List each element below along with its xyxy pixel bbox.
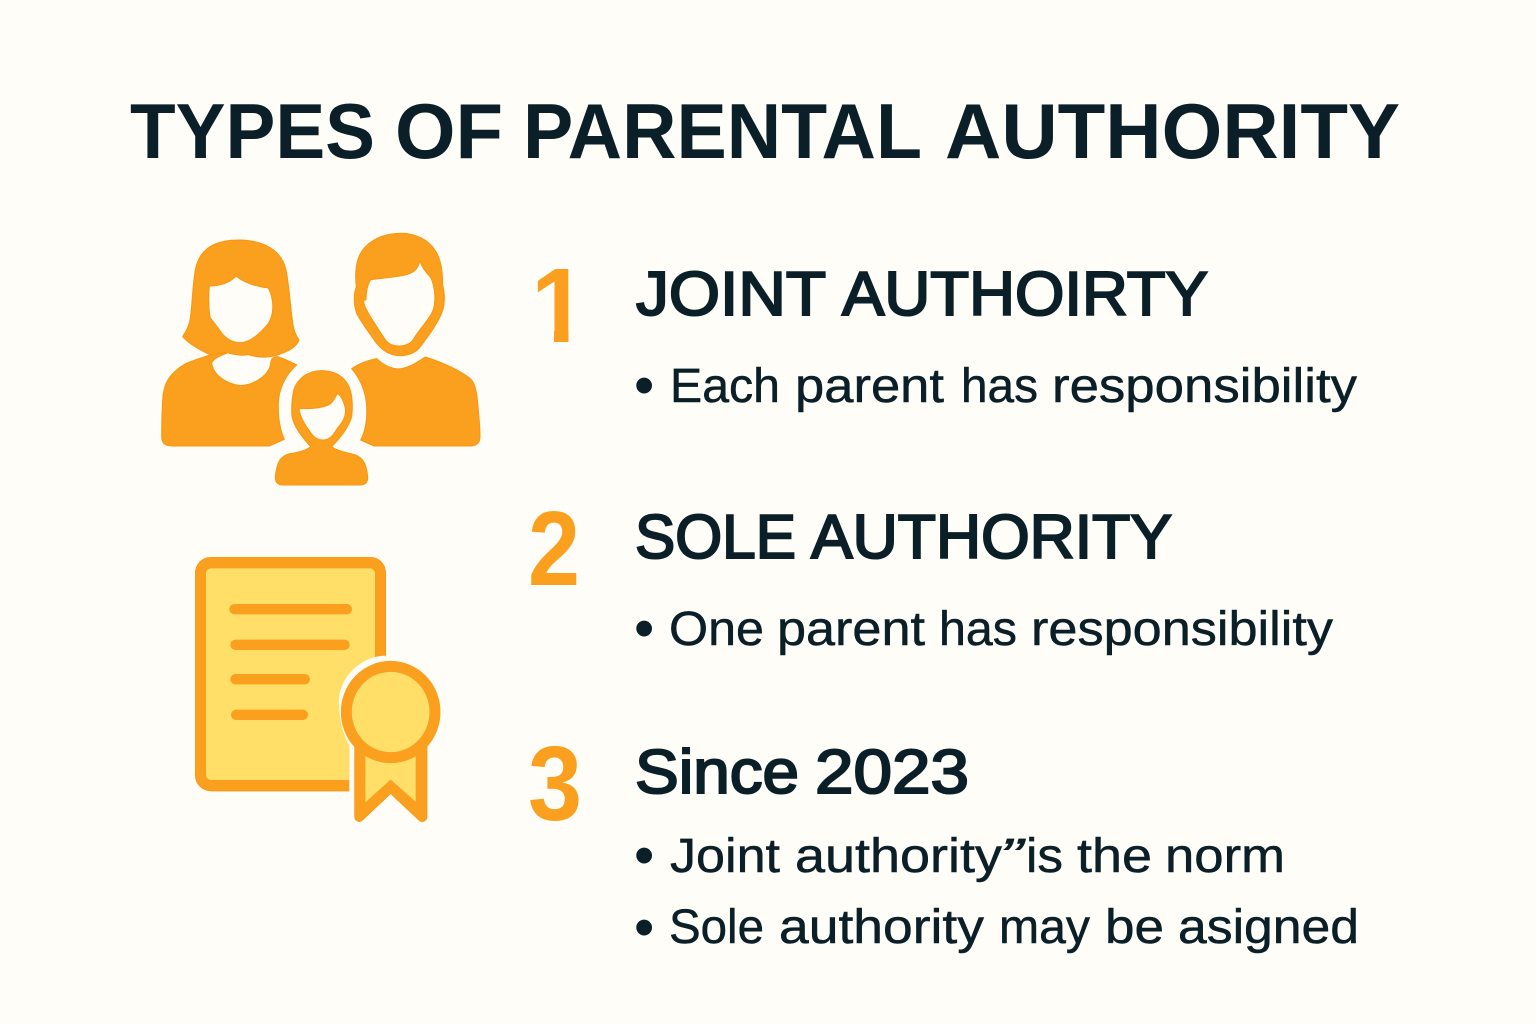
ribbon: [355, 742, 427, 822]
heading: AUTHORITY: [811, 503, 1172, 572]
white gap around seal: [339, 656, 386, 792]
item 2: sole authority: [528, 490, 1333, 661]
bullet text: [634, 353, 1357, 418]
bullet text: Each: [670, 360, 780, 413]
number 3: 3: [528, 725, 582, 843]
bullet text: sole authority: Sole: [669, 901, 764, 954]
heading: Since: [635, 738, 799, 807]
bullet text: joint authority: is: [1026, 830, 1063, 883]
bullet text: parent: [795, 360, 944, 413]
bullet text: sole authority: [634, 895, 1359, 960]
title: AUTHORITY: [945, 87, 1400, 175]
man's body: [352, 357, 480, 446]
bullet text: has: [939, 603, 1017, 656]
bullet text: responsibility: [1052, 360, 1357, 413]
man's hair and face outline: [354, 233, 444, 356]
text lines: [229, 604, 352, 720]
number 2: 2: [528, 490, 580, 608]
bullet text: sole authority: asigned: [1178, 901, 1359, 954]
bullet text: joint authority: •: [634, 823, 654, 888]
bullet text: sole authority: authority: [779, 901, 984, 954]
heading: AUTHOIRTY: [842, 260, 1208, 329]
title: TYPES: [130, 87, 375, 175]
bullet text: joint authority: norm: [1165, 830, 1285, 883]
bullet text: •: [634, 353, 654, 418]
bullet text: sole authority: •: [634, 895, 654, 960]
title: PARENTAL: [523, 87, 922, 175]
heading: JOINT: [636, 260, 826, 329]
title: [130, 87, 1400, 175]
heading: SOLE: [635, 503, 796, 572]
number 1: 1: [531, 247, 587, 365]
icon: certificate with ribbon: [195, 557, 435, 822]
document paper: [206, 568, 375, 780]
bullet text: sole authority: may: [999, 901, 1090, 954]
woman's hair: [183, 240, 299, 357]
item 3: since 2023: [528, 725, 1359, 960]
bullet text: joint authority: [634, 823, 1285, 888]
seal: [346, 666, 435, 758]
bullet text: •: [634, 596, 654, 661]
item 1: joint authority: [522, 247, 1357, 418]
title: OF: [395, 87, 503, 175]
heading: [635, 738, 969, 807]
bullet text: joint authority: the: [1077, 830, 1152, 883]
woman's body: [162, 353, 297, 446]
ribbon inner: [365, 753, 416, 802]
bullet text: sole authority: be: [1105, 901, 1164, 954]
bullet text: [634, 596, 1333, 661]
child's head: [275, 371, 368, 485]
icon: family of three: [162, 233, 480, 485]
bullet text: parent: [777, 603, 925, 656]
heading: [635, 503, 1172, 572]
bullet text: joint authority: ”: [999, 830, 1026, 883]
heading: 2023: [815, 738, 969, 807]
heading: [636, 260, 1208, 329]
bullet text: has: [961, 360, 1038, 413]
bullet text: joint authority: Joint: [670, 830, 780, 883]
bullet text: joint authority: authority: [795, 830, 1002, 883]
bullet text: One: [669, 603, 764, 656]
bullet text: responsibility: [1031, 603, 1333, 656]
document: [195, 557, 386, 791]
